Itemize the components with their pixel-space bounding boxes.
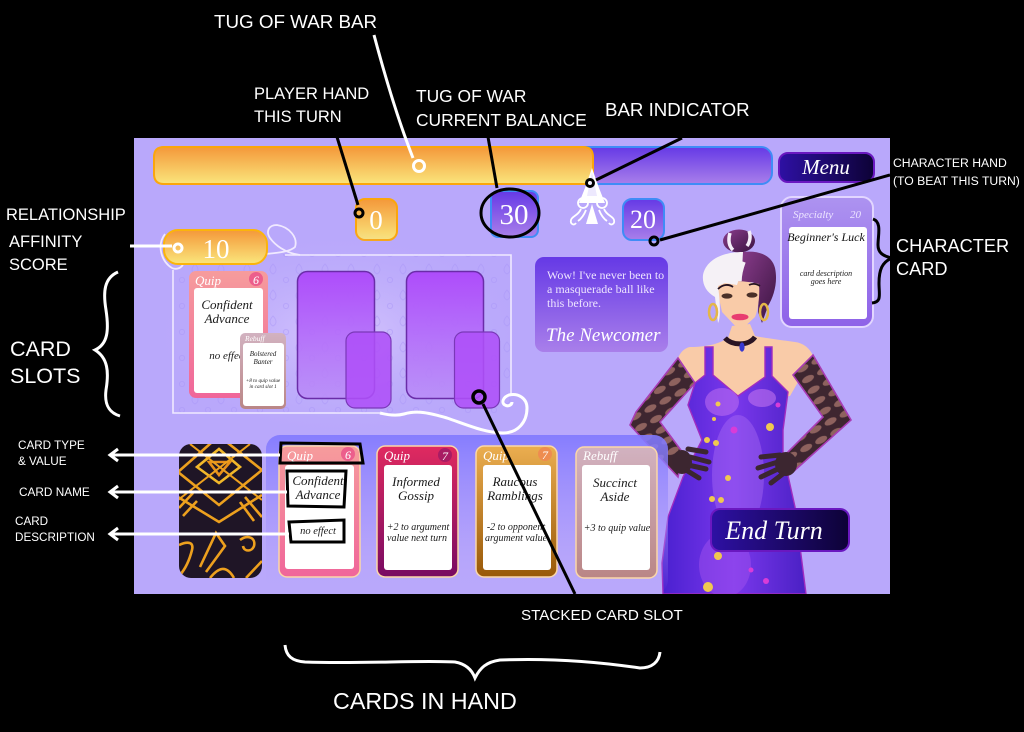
character card: Specialty	[793, 209, 833, 221]
body skin	[678, 324, 813, 400]
character card: goes here	[811, 277, 842, 286]
annotation: black callout lines	[280, 137, 892, 594]
label: card type and value: CARD TYPE	[18, 439, 85, 452]
label: card slots: SLOTS	[10, 364, 80, 388]
label: player hand this turn: PLAYER HAND	[254, 85, 369, 103]
label: bar indicator: BAR INDICATOR	[605, 99, 750, 120]
stacked card in slot 1: Advance	[204, 311, 250, 326]
eyes	[722, 293, 732, 299]
stacked card in slot 1: Banter	[253, 358, 273, 366]
hand card: Raucous Ramblings	[476, 446, 557, 577]
speech bubble: a masquerade ball like	[547, 282, 655, 296]
hand card: Confident Advance: Quip	[287, 448, 314, 463]
hand card: Succinct Aside: Rebuff	[582, 448, 619, 463]
hand card: Informed Gossip: 7	[442, 449, 449, 463]
hand card: Raucous Ramblings: Ramblings	[486, 488, 543, 503]
left arm glove	[630, 358, 695, 477]
hand card: Informed Gossip: +2 to argument	[387, 522, 449, 533]
hand card: Succinct Aside: Succinct	[593, 475, 637, 490]
label: relationship affinity score: SCORE	[9, 256, 68, 274]
hand card: Informed Gossip: Quip	[384, 448, 410, 463]
label: card description: DESCRIPTION	[15, 531, 95, 544]
label: stacked card slot: STACKED CARD SLOT	[521, 607, 683, 624]
label: relationship affinity score: AFFINITY	[9, 233, 82, 251]
stacked card in slot 1: no effect	[209, 350, 248, 362]
stacked card in slot 1: Rebuff	[244, 334, 265, 343]
end turn button: End Turn	[724, 516, 823, 545]
left glove hand	[672, 449, 709, 478]
cards in hand tray	[266, 435, 668, 594]
deck	[178, 436, 262, 578]
hand card: Confident Advance: 6	[345, 448, 351, 462]
hair white	[703, 252, 743, 323]
hand card: Informed Gossip: Gossip	[398, 488, 435, 503]
end turn button	[711, 509, 849, 551]
hand card: Succinct Aside	[576, 447, 657, 578]
character card: 20	[850, 209, 862, 221]
relationship affinity score: 10	[202, 234, 230, 264]
stacked card in slot 1: Quip	[195, 273, 222, 288]
panel: game screen	[134, 138, 890, 597]
lips	[732, 314, 748, 320]
stacked card in slot 1: in card slot 1	[249, 384, 277, 390]
hand card: Confident Advance: no effect	[300, 526, 337, 537]
label: card type and value: & VALUE	[18, 455, 67, 468]
relationship affinity score	[164, 230, 267, 264]
hand card: Succinct Aside: Aside	[600, 489, 630, 504]
character card	[781, 197, 873, 327]
character hand value	[623, 199, 664, 240]
current balance value	[491, 191, 538, 237]
hand card: Raucous Ramblings: -2 to opponent	[487, 522, 545, 533]
choker	[725, 337, 755, 352]
speech bubble: The Newcomer	[546, 325, 661, 346]
stacked card in slot 1: Confident	[201, 297, 253, 312]
right glove hand	[758, 452, 797, 483]
label: character hand: (TO BEAT THIS TURN)	[893, 174, 1020, 188]
earrings	[709, 304, 768, 320]
hair purple	[738, 252, 776, 323]
hand card: Confident Advance	[279, 446, 360, 577]
player hand value: 0	[369, 205, 383, 235]
label: character card: CHARACTER	[896, 236, 1009, 256]
speech bubble: Wow! I've never been to	[547, 268, 664, 282]
speech bubble	[535, 257, 668, 352]
label: card slots: CARD	[10, 337, 71, 361]
hand card: Confident Advance: Advance	[295, 487, 341, 502]
label: player hand this turn: THIS TURN	[254, 108, 342, 126]
label: card name: CARD NAME	[19, 485, 90, 499]
hand card: Raucous Ramblings: 7	[542, 448, 549, 462]
label: character card: CARD	[896, 259, 948, 279]
menu button: Menu	[801, 155, 850, 179]
hand card: Raucous Ramblings: Raucous	[492, 474, 537, 489]
stacked card in slot 1: Bolstered	[250, 350, 277, 358]
hand card: Raucous Ramblings: argument value	[485, 533, 548, 544]
character card: Beginner's Luck	[787, 230, 865, 244]
current balance value: 30	[500, 199, 528, 231]
label: tug of war bar: TUG OF WAR BAR	[214, 11, 377, 32]
label: tug of war current balance: CURRENT BALANCE	[416, 110, 587, 130]
hand card: Succinct Aside: +3 to quip value	[584, 523, 651, 534]
stars	[703, 402, 774, 592]
character hand value: 20	[630, 205, 656, 234]
menu button	[779, 153, 874, 182]
empty card slot 2	[298, 272, 391, 408]
hand card: Informed Gossip: value next turn	[387, 533, 447, 544]
character card: card description	[800, 269, 852, 278]
label: tug of war current balance: TUG OF WAR	[416, 86, 526, 106]
stacked card in slot 1: +8 to quip value	[246, 378, 281, 384]
brows	[718, 284, 760, 289]
bar indicator icon	[571, 168, 614, 224]
right arm glove	[787, 355, 851, 472]
dress	[662, 347, 806, 594]
character illustration	[630, 230, 851, 597]
stacked card in slot 1: 6	[253, 273, 259, 287]
label: character hand: CHARACTER HAND	[893, 156, 1007, 170]
empty card slot 3	[406, 272, 500, 408]
label: cards in hand: CARDS IN HAND	[333, 688, 517, 714]
player hand value	[356, 199, 397, 240]
swirl frame	[161, 225, 527, 433]
dress sparkle	[712, 415, 764, 508]
stacked card in slot 1	[189, 271, 286, 409]
tug of war bar	[154, 147, 772, 184]
label: relationship affinity score: RELATIONSHIP	[6, 206, 126, 224]
speech bubble: this before.	[547, 296, 601, 310]
hand card: Informed Gossip	[377, 446, 458, 577]
hand card: Raucous Ramblings: Quip	[483, 448, 510, 463]
panel: card slots area	[145, 225, 535, 440]
label: card description: CARD	[15, 515, 48, 528]
hand card: Informed Gossip: Informed	[391, 474, 440, 489]
face	[718, 281, 760, 326]
hand card: Confident Advance: Confident	[292, 473, 344, 488]
annotation: white callout lines	[95, 35, 660, 678]
bun	[723, 230, 755, 252]
